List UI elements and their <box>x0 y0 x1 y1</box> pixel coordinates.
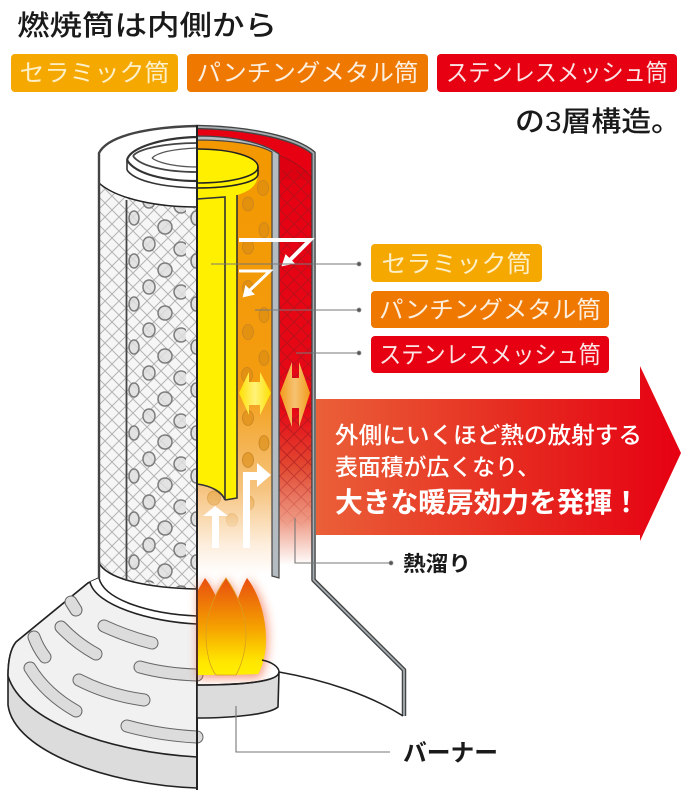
top rings <box>127 137 197 160</box>
label: top stainless mesh <box>437 54 677 92</box>
stainless mesh layer: red <box>197 126 312 565</box>
outer wall and flare <box>197 127 404 716</box>
label: top ceramic: セラミック筒 <box>20 60 170 87</box>
big arrow <box>316 366 681 541</box>
center divider <box>196 125 198 790</box>
label: punching metal: パンチングメタル筒 <box>379 297 601 324</box>
label: stainless mesh: ステンレスメッシュ筒 <box>379 342 601 369</box>
double arrow: yellow <box>239 372 271 415</box>
arrow text <box>335 422 642 518</box>
subtitle: の3層構造。 <box>515 106 681 137</box>
label: top ceramic <box>11 54 178 92</box>
label: top punching metal: パンチングメタル筒 <box>196 60 418 87</box>
burner <box>197 660 279 718</box>
outer cylinder: left half <box>99 126 197 589</box>
bent arrow <box>243 463 271 548</box>
arrow text: 外側にいくほど熱の放射する <box>335 422 642 448</box>
double arrow: orange <box>280 362 310 427</box>
title: 燃焼筒は内側から <box>17 10 277 41</box>
label: ceramic: セラミック筒 <box>382 251 532 278</box>
label: punching metal <box>371 291 609 328</box>
punching metal layer: orange <box>197 140 272 575</box>
heat arrows: white <box>239 240 310 296</box>
base slots <box>30 602 197 737</box>
label: stainless mesh <box>371 336 609 373</box>
up arrow <box>203 506 228 548</box>
label: ceramic <box>371 244 542 282</box>
arrow text: 表面積が広くなり、 <box>335 454 540 480</box>
flames <box>198 578 268 678</box>
callout: heat pool: 熱溜り <box>403 553 471 576</box>
leader lines <box>211 262 393 752</box>
middle wall <box>197 136 279 578</box>
base: left half <box>8 560 197 788</box>
arrow text: 大きな暖房効力を発揮！ <box>335 487 640 518</box>
callout: burner: バーナー <box>403 740 498 767</box>
label: top stainless mesh: ステンレスメッシュ筒 <box>446 60 668 87</box>
label: top punching metal <box>187 54 428 92</box>
ceramic layer: yellow column <box>197 149 258 500</box>
